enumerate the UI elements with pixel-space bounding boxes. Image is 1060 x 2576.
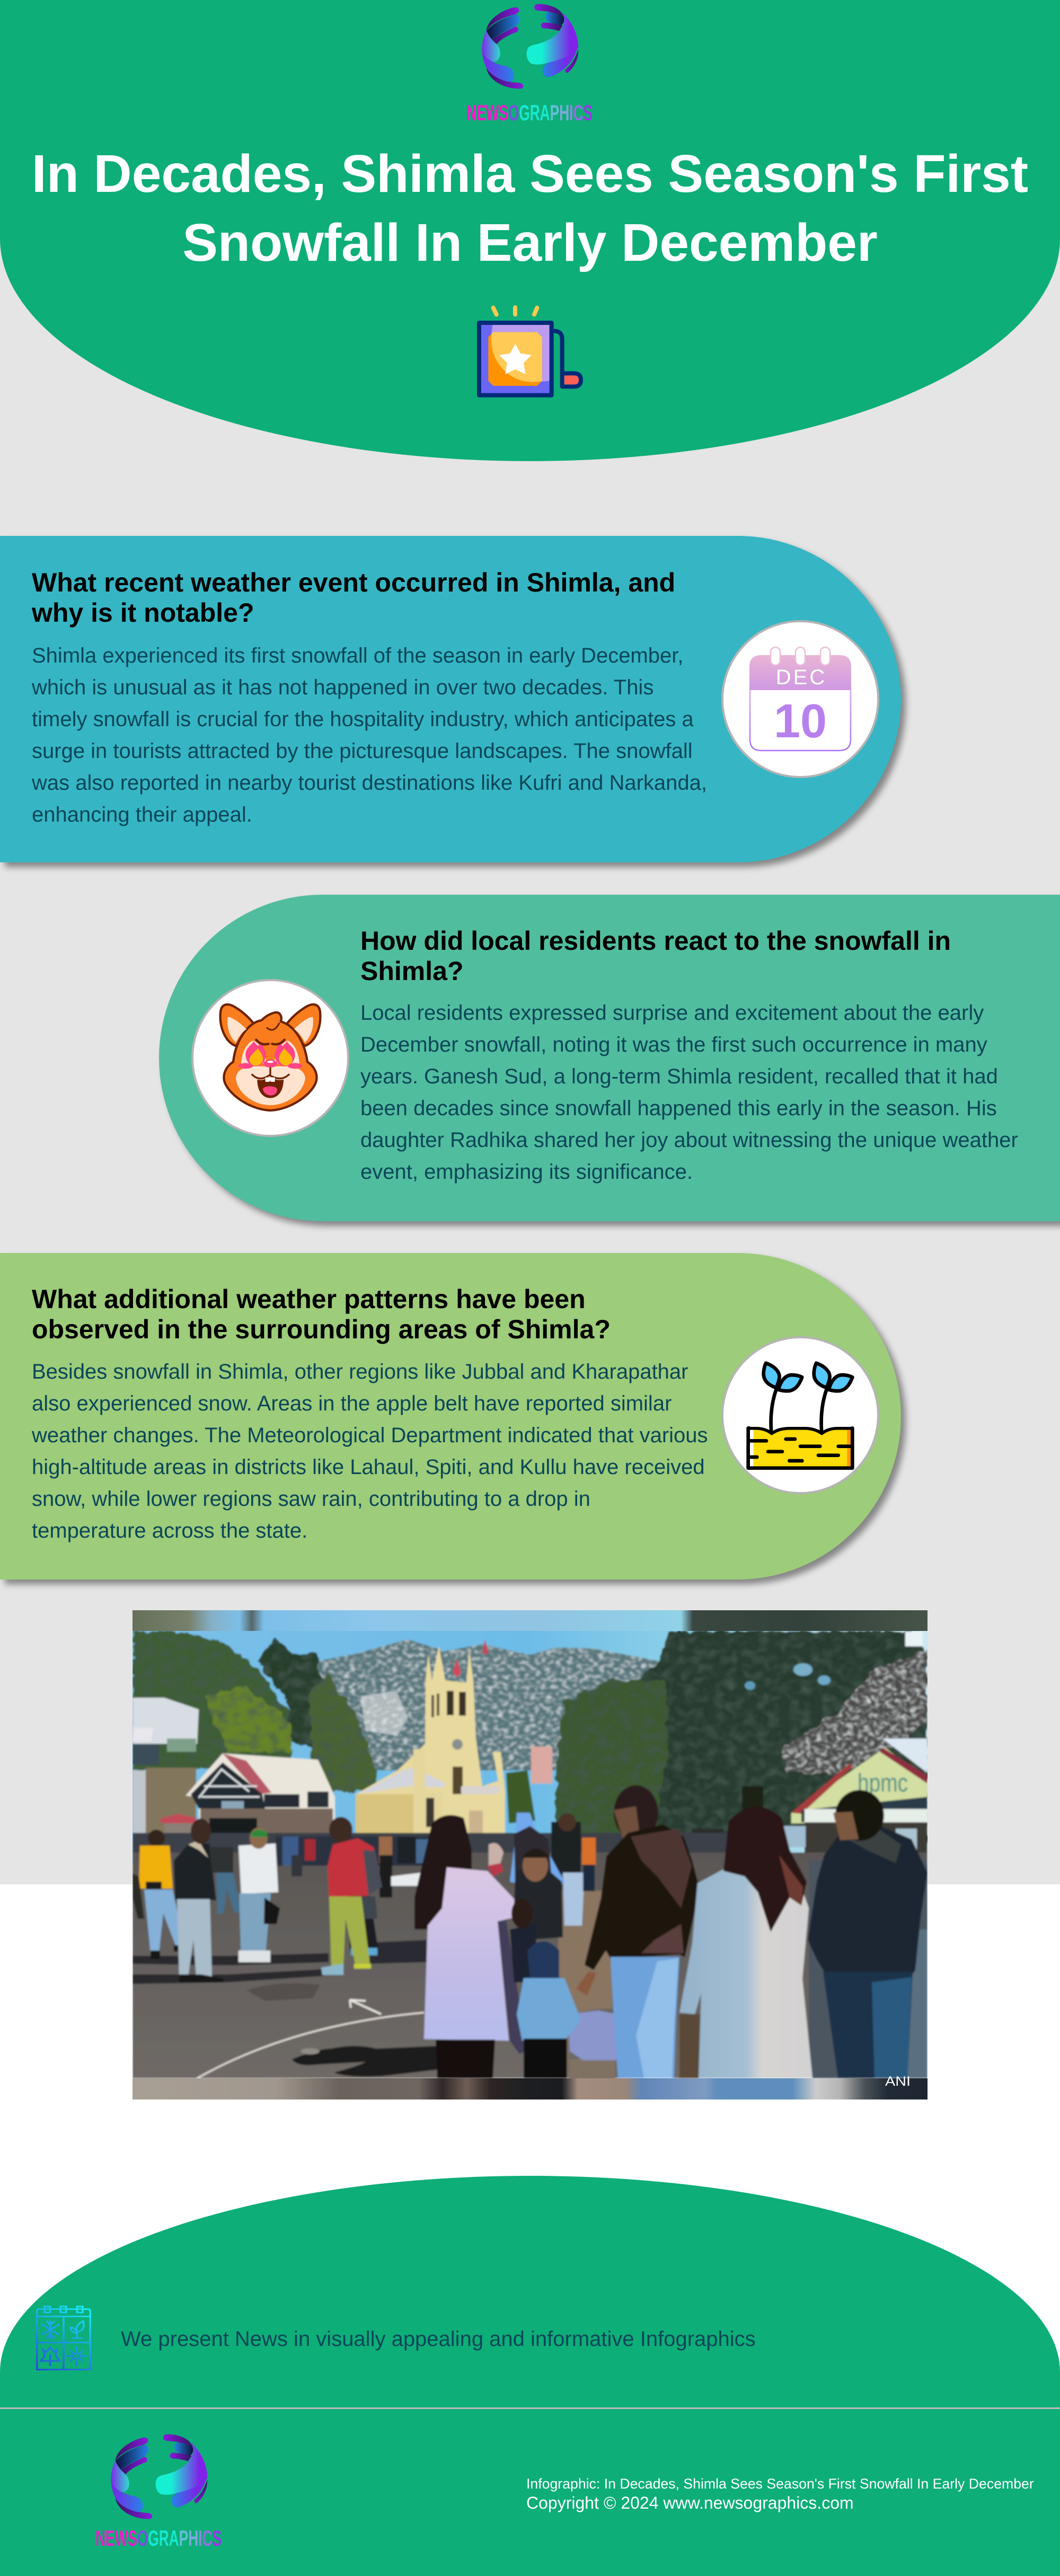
small child (510, 1924, 538, 1982)
icon: excited squirrel (191, 979, 349, 1137)
heading: observed in the surrounding areas of Shimla? (32, 1315, 611, 1344)
hooded man in vest (510, 1813, 564, 1892)
yellow jacket man (148, 1830, 165, 1847)
panel: weather event (0, 536, 901, 862)
hpmc kiosk (791, 1748, 928, 1823)
background crowd (276, 1837, 429, 1866)
body text: December snowfall, noting it was the first such occurrence in many (360, 1033, 987, 1056)
strip behind crowd (132, 1832, 728, 1855)
body text (360, 997, 1018, 1188)
icon: calendar Dec 10 (721, 620, 879, 778)
left trees (132, 1631, 376, 1792)
heading (32, 568, 675, 628)
footer banner (0, 2176, 1060, 2576)
body text: snow, while lower regions saw rain, contributing to a drop in (32, 1487, 590, 1511)
white buildings left (132, 1698, 199, 1744)
icon: sprouts (721, 1336, 879, 1494)
header banner (0, 0, 1060, 461)
body text: daughter Radhika shared her joy about witnessing the unique weather (360, 1128, 1018, 1152)
man in red hoodie (329, 1817, 352, 1842)
man in sweater (209, 1847, 233, 1873)
photo: tourists on the Ridge in Shimla: hpmc (858, 1769, 908, 1797)
body text: temperature across the state. (32, 1519, 307, 1542)
body text: also experienced snow. Areas in the apple belt have reported similar (32, 1392, 672, 1415)
church (356, 1646, 505, 1834)
icon: newsographics logo: NEWSOGRAPHICS (466, 100, 593, 125)
woman in grey coat (679, 1869, 812, 2078)
heading: why is it notable? (32, 598, 254, 628)
grey page background (0, 0, 1060, 1884)
toddler (527, 1941, 559, 1978)
body text: Besides snowfall in Shimla, other regions like Jubbal and Kharapathar (32, 1360, 688, 1383)
footer divider (0, 2407, 1060, 2409)
man in white shirt (238, 1843, 278, 1894)
footer credits (526, 2474, 1034, 2512)
heading (32, 1284, 611, 1345)
icon: seasons calendar (36, 2306, 91, 2370)
photo: tourists on the Ridge in Shimla (132, 1610, 928, 2099)
ground (132, 1852, 928, 2078)
heading (360, 926, 951, 986)
heading: Shimla? (360, 956, 463, 986)
man in black puffer (174, 1843, 216, 1900)
icon: mug with star (477, 305, 583, 398)
body text: Local residents expressed surprise and excitement about the early (360, 1001, 984, 1025)
copyright line: Copyright © 2024 www.newsographics.com (526, 2493, 854, 2512)
tagline: We present News in visually appealing and informative Infographics (121, 2327, 756, 2351)
icon: footer newsographics logo: NEWSOGRAPHICS (95, 2526, 222, 2551)
panel: resident reaction (159, 895, 1060, 1221)
body text: surge in tourists attracted by the picturesque landscapes. The snowfall (32, 739, 693, 763)
body text: timely snowfall is crucial for the hospitality industry, which anticipates a (32, 708, 694, 731)
trees behind church, tower block (506, 1770, 535, 1823)
body text: weather changes. The Meteorological Department indicated that various (32, 1424, 708, 1447)
heading: What recent weather event occurred in Shimla, and (32, 568, 675, 597)
man in denim jacket (808, 1823, 928, 1977)
body text: high-altitude areas in districts like Lahaul, Spiti, and Kullu have received (32, 1455, 705, 1479)
woman with lilac coat hair (414, 1815, 472, 1929)
icon: newsographics logo (466, 4, 593, 125)
heading: What additional weather patterns have been (32, 1284, 586, 1314)
heading: How did local residents react to the snowfall in (360, 926, 951, 956)
tudor house (186, 1753, 335, 1829)
snowy hill (315, 1639, 662, 1770)
body text: enhancing their appeal. (32, 803, 252, 826)
body text: was also reported in nearby tourist destinations like Kufri and Narkanda, (32, 771, 707, 795)
body text (32, 644, 707, 826)
body text: which is unusual as it has not happened in over two decades. This (32, 676, 653, 699)
icon: footer newsographics logo (95, 2434, 222, 2553)
panel: surrounding areas (0, 1253, 901, 1580)
body text: been decades since snowfall happened this early in the season. His (360, 1097, 997, 1120)
body text: Shimla experienced its first snowfall of the season in early December, (32, 644, 683, 667)
icon: calendar Dec 10: DEC (776, 666, 827, 689)
body text (32, 1356, 708, 1547)
title (32, 144, 1028, 272)
boy in puffer (514, 1866, 563, 1940)
man in brown jacket (614, 1785, 658, 1840)
right trees (554, 1631, 928, 1845)
icon: calendar Dec 10: 10 (774, 695, 827, 748)
infographic title line: Infographic: In Decades, Shimla Sees Season's First Snowfall In Early December (526, 2476, 1034, 2492)
title: Snowfall In Early December (182, 213, 878, 272)
body text: years. Ganesh Sud, a long-term Shimla resident, recalled that it had (360, 1065, 998, 1088)
title: In Decades, Shimla Sees Season's First (32, 144, 1028, 204)
body text: event, emphasizing its significance. (360, 1160, 693, 1184)
photo: tourists on the Ridge in Shimla: ANI (885, 2074, 911, 2089)
